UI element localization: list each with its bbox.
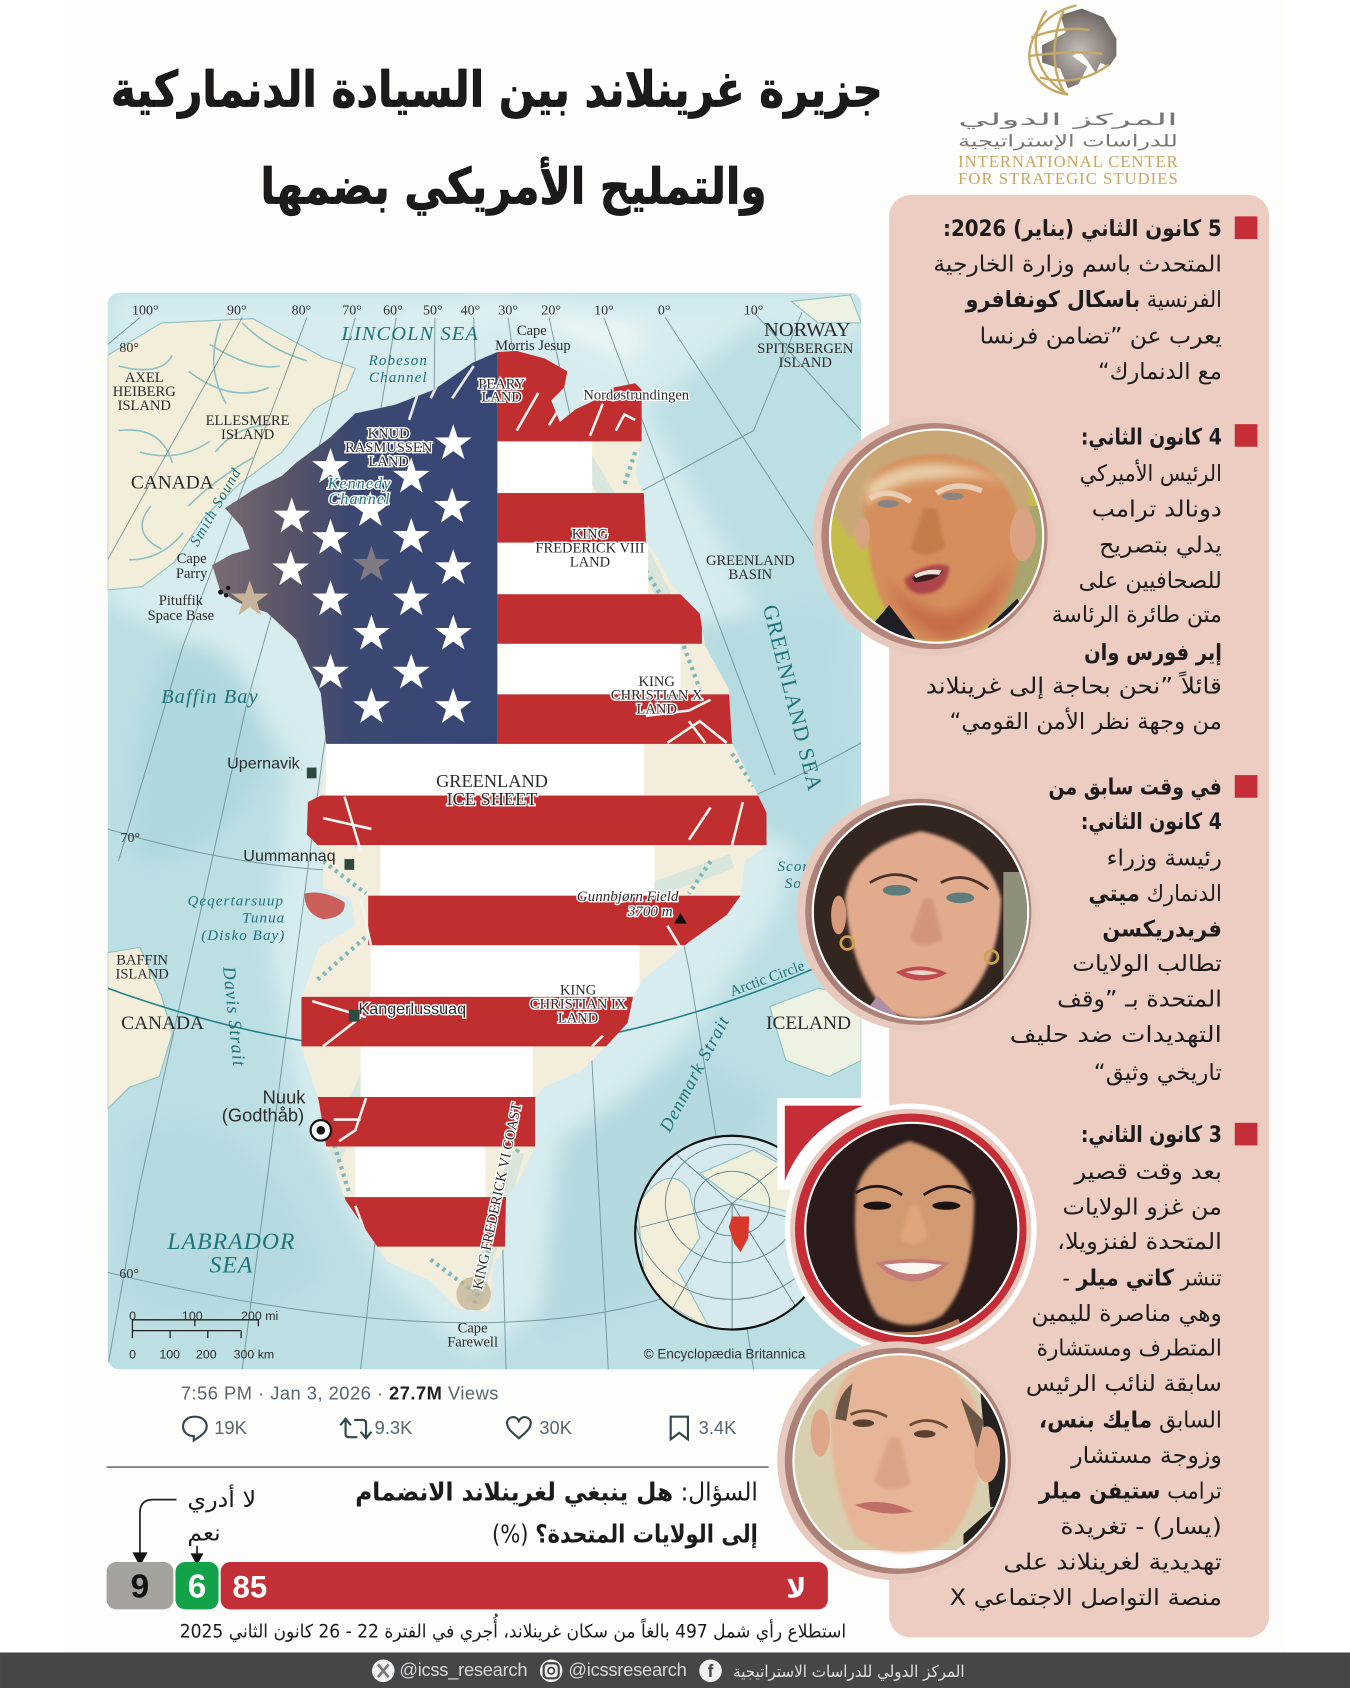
- map labels: Uummannaq: [243, 847, 336, 865]
- map labels: 100°: [132, 303, 159, 318]
- poll bar: 9: [131, 1569, 149, 1606]
- scale bar: 300 km: [234, 1348, 274, 1362]
- logo: International Center for Strategic Studies: المركز الدولي: [958, 110, 1178, 130]
- icon: comment: [183, 1417, 207, 1440]
- scale bar: 100: [182, 1309, 203, 1323]
- map labels: PEARY: [478, 377, 526, 393]
- logo: International Center for Strategic Studies: للدراسات الإستراتيجية: [958, 131, 1178, 151]
- entry: 3 January, Katie Miller: وهي مناصرة لليمين: [1031, 1301, 1222, 1327]
- poll labels and arrows: نعم: [187, 1521, 221, 1547]
- flag red stripes: [296, 344, 775, 1247]
- tweet metadata: 19K: [214, 1417, 247, 1438]
- entry: 5 January: 5 كانون الثاني (يناير) 2026:: [943, 216, 1222, 242]
- map labels: CHRISTIAN X: [611, 688, 703, 704]
- map labels: KING FREDERICK VI COAST: [470, 1101, 525, 1291]
- map labels: KING: [572, 526, 609, 542]
- map labels: 20°: [541, 303, 561, 318]
- entry: 4 January, Trump: يدلي بتصريح: [1099, 532, 1222, 558]
- entry: earlier on 4 January, Frederiksen: فريدريكسن: [1102, 917, 1222, 943]
- map labels: 10°: [594, 303, 614, 318]
- map labels: ISLAND: [221, 427, 274, 443]
- map labels: 80°: [292, 303, 311, 318]
- map of Greenland with US flag overlay: [108, 293, 861, 1369]
- poll bar: [107, 1562, 828, 1609]
- map labels: [113, 303, 854, 1362]
- footer bar: المركز الدولي للدراسات الاستراتيجية: [733, 1662, 965, 1682]
- pale water patches: [108, 293, 861, 1356]
- portrait: Stephen Miller: [777, 1341, 1016, 1580]
- stars: [231, 424, 472, 723]
- entry: earlier on 4 January, Frederiksen: في وقت سابق من: [1049, 774, 1222, 800]
- entry: 4 January, Trump: متن طائرة الرئاسة: [1052, 602, 1222, 628]
- map labels: HEIBERG: [113, 384, 176, 400]
- portrait: Donald Trump: [813, 417, 1052, 656]
- poll bar: لا: [786, 1574, 806, 1605]
- entry: 3 January, Katie Miller: وزوجة مستشار: [1070, 1443, 1222, 1469]
- fjords: [312, 390, 743, 1249]
- poll question: إلى الولايات المتحدة؟ (%): [492, 1520, 758, 1550]
- map labels: ELLESMERE: [206, 413, 290, 429]
- entry: 4 January, Trump: دونالد ترامب: [1092, 497, 1222, 523]
- title: والتمليح الأمريكي بضمها: [261, 155, 767, 216]
- poll question: [355, 1478, 758, 1550]
- entry: 4 January, Trump: الرئيس الأميركي: [1080, 459, 1222, 487]
- entry: 3 January, Katie Miller: منصة التواصل الاجتماعي X: [950, 1585, 1222, 1611]
- entry: 5 January: مع الدنمارك“: [1098, 359, 1222, 385]
- map labels: RASMUSSEN: [345, 440, 433, 456]
- map labels: SPITSBERGEN: [757, 341, 854, 357]
- map labels: Parry: [176, 566, 208, 582]
- tweet metadata: 9.3K: [375, 1417, 412, 1438]
- map labels: Gunnbjørn Field: [577, 889, 679, 905]
- tweet metadata: [181, 1382, 736, 1440]
- white backing and red corner: [777, 1098, 889, 1190]
- map labels: LAND: [570, 554, 610, 570]
- map labels: KING: [560, 983, 597, 999]
- poll bar: 85: [233, 1570, 267, 1605]
- entry: 3 January, Katie Miller: المتطرف ومستشارة: [1037, 1335, 1222, 1361]
- map labels: Kangerlussuaq: [358, 1000, 466, 1018]
- poll source note: استطلاع رأي شمل 497 بالغاً من سكان غرينلاند، أُجري في الفترة 22 - 26 كانون الثاني 2025: [180, 1613, 846, 1642]
- flag canton: [205, 344, 497, 744]
- scale bar: [130, 1311, 278, 1358]
- scale bar: 100: [159, 1348, 180, 1362]
- entry: earlier on 4 January, Frederiksen: المتحدة بـ ”وقف: [1057, 987, 1222, 1013]
- entry: 3 January, Katie Miller: [950, 1122, 1222, 1611]
- map labels: CHRISTIAN IX: [530, 997, 627, 1013]
- tweet metadata: 7:56 PM · Jan 3, 2026 · 27.7M Views: [181, 1382, 498, 1403]
- map labels: BAFFIN: [116, 953, 168, 969]
- map labels: Qeqertarsuup: [187, 893, 284, 909]
- map labels: Nuuk: [263, 1086, 306, 1107]
- icon: X: [372, 1659, 395, 1682]
- map labels: LAND: [368, 454, 409, 470]
- map labels: FREDERICK VIII: [535, 540, 645, 556]
- map labels: Nordøstrundingen: [583, 387, 690, 403]
- icon: heart: [507, 1417, 531, 1438]
- map labels: LAND: [637, 702, 677, 718]
- poll labels and arrows: لا أدري: [187, 1484, 256, 1513]
- graticule: [108, 312, 861, 1369]
- entry: 4 January, Trump: [926, 425, 1222, 735]
- map labels: KNUD: [368, 426, 410, 442]
- title: [111, 61, 883, 216]
- map labels: LAND: [482, 390, 522, 406]
- entry: 5 January: يعرب عن ”تضامن فرنسا: [980, 323, 1222, 349]
- map labels: Cape: [517, 323, 547, 339]
- map labels: GREENLAND SEA: [758, 602, 827, 794]
- map labels: 60°: [383, 303, 403, 318]
- entry: earlier on 4 January, Frederiksen: 4 كانون الثاني:: [1081, 809, 1222, 835]
- map labels: Scor: [777, 859, 809, 875]
- scale bar: 200 mi: [241, 1309, 278, 1323]
- entry: 4 January, Trump: للصحافيين على: [1079, 568, 1222, 594]
- map labels: 70°: [342, 303, 362, 318]
- portrait: Mette Frederiksen: [797, 792, 1036, 1031]
- entry: 4 January, Trump: قائلاً ”نحن بحاجة إلى غرينلاند: [926, 671, 1222, 699]
- map labels: Baffin Bay: [161, 686, 259, 708]
- map labels: LABRADOR: [166, 1229, 296, 1255]
- map labels: Robeson: [368, 353, 428, 369]
- inset globe: [634, 1134, 805, 1331]
- map labels: SEA: [209, 1252, 253, 1278]
- map labels: 30°: [498, 303, 518, 318]
- map labels: Kennedy: [327, 476, 392, 493]
- entry: earlier on 4 January, Frederiksen: [1010, 774, 1222, 1086]
- bullet: [1235, 216, 1257, 239]
- map labels: 3700 m: [627, 904, 673, 920]
- map labels: 80°: [119, 341, 139, 356]
- map labels: GREENLAND: [706, 553, 795, 569]
- poll labels and arrows: [132, 1484, 256, 1566]
- map labels: 90°: [227, 303, 247, 318]
- map labels: LINCOLN SEA: [341, 323, 479, 345]
- Canadian arctic land: [108, 319, 355, 590]
- logo: International Center for Strategic Studies: [958, 5, 1179, 188]
- map labels: 10°: [744, 303, 763, 318]
- map labels: 60°: [119, 1267, 139, 1282]
- poll question: السؤال: هل ينبغي لغرينلاند الانضمام: [355, 1478, 758, 1508]
- map labels: Space Base: [148, 608, 214, 624]
- scale bar: 0: [129, 1348, 136, 1362]
- entry: 3 January, Katie Miller: ترامب ستيفن ميلر: [1038, 1479, 1222, 1505]
- entry: 3 January, Katie Miller: سابقة لنائب الرئيس: [1026, 1371, 1222, 1397]
- entry: earlier on 4 January, Frederiksen: رئيسة وزراء: [1107, 846, 1222, 872]
- map labels: 0°: [658, 303, 671, 318]
- tweet metadata: 3.4K: [699, 1417, 736, 1438]
- map labels: ISLAND: [118, 398, 171, 414]
- arctic circle: [108, 968, 812, 1042]
- entry: 4 January, Trump: إير فورس وان: [1084, 640, 1222, 666]
- map labels: NORWAY: [764, 319, 851, 341]
- map labels: AXEL: [125, 370, 164, 386]
- entry: 3 January, Katie Miller: بعد وقت قصير: [1073, 1159, 1222, 1185]
- map labels: 70°: [120, 831, 140, 846]
- entry: 3 January, Katie Miller: تهديدية لغرينلاند على: [1003, 1550, 1222, 1576]
- map labels: ISLAND: [116, 967, 169, 983]
- map labels: ICELAND: [766, 1013, 851, 1034]
- Greenland land: [205, 344, 775, 1324]
- bullet: [1235, 775, 1257, 798]
- map labels: Morris Jesup: [495, 338, 571, 354]
- map labels: Cape: [177, 551, 207, 567]
- map labels: GREENLAND: [436, 771, 548, 791]
- footer bar: @icssresearch: [568, 1659, 687, 1680]
- map labels: Davis Strait: [219, 965, 249, 1068]
- faint canton patches: [408, 365, 475, 420]
- tweet metadata: 30K: [539, 1417, 572, 1438]
- icon: bookmark: [671, 1417, 688, 1439]
- map labels: Upernavik: [227, 755, 301, 773]
- poll bar: 6: [188, 1569, 206, 1606]
- bullet: [1235, 424, 1257, 447]
- map labels: 50°: [423, 303, 443, 318]
- map labels: Pituffik: [159, 593, 204, 609]
- entry: 3 January, Katie Miller: المتحدة لفنزويلا،: [1057, 1229, 1222, 1255]
- entry: earlier on 4 January, Frederiksen: تطالب الولايات: [1072, 951, 1222, 977]
- entry: 3 January, Katie Miller: السابق مايك بنس،: [1039, 1407, 1222, 1433]
- footer bar: @icss_research: [399, 1659, 528, 1681]
- map labels: Channel: [369, 370, 428, 386]
- flag white stripes: [497, 441, 592, 493]
- entry: earlier on 4 January, Frederiksen: التهديدات ضد حليف: [1010, 1022, 1222, 1048]
- icon: instagram: [540, 1659, 563, 1682]
- entry: 4 January, Trump: 4 كانون الثاني:: [1081, 425, 1222, 451]
- map labels: So: [785, 876, 802, 892]
- map labels: Denmark Strait: [655, 1012, 733, 1136]
- entry: 3 January, Katie Miller: تنشر كاتي ميلر -: [1063, 1265, 1222, 1291]
- entry: earlier on 4 January, Frederiksen: تاريخي وثيق“: [1094, 1060, 1222, 1086]
- title: جزيرة غرينلاند بين السيادة الدنماركية: [111, 61, 883, 120]
- Disko island: [305, 892, 345, 919]
- map labels: (Disko Bay): [201, 928, 285, 944]
- entry: 5 January: [933, 216, 1222, 385]
- map labels: BASIN: [729, 567, 773, 583]
- map labels: ICE SHEET: [447, 789, 537, 809]
- entry: 4 January, Trump: من وجهة نظر الأمن القومي“: [950, 707, 1222, 735]
- map labels: Farewell: [447, 1335, 498, 1351]
- map labels: 40°: [461, 303, 480, 318]
- map labels: KING: [639, 674, 675, 690]
- map labels: Channel: [328, 491, 391, 508]
- scale bar: 0: [129, 1309, 136, 1323]
- map labels: LAND: [558, 1011, 598, 1027]
- entry: 5 January: الفرنسية باسكال كونفافرو: [965, 287, 1222, 313]
- panel: timeline: [889, 195, 1269, 1637]
- entry: 3 January, Katie Miller: من غزو الولايات: [1063, 1194, 1222, 1220]
- entry: 3 January, Katie Miller: (يسار) - تغريدة: [1060, 1514, 1222, 1540]
- portrait: Katie Miller: [785, 1103, 1037, 1355]
- bullet: [1235, 1123, 1257, 1145]
- map labels: CANADA: [121, 1013, 204, 1034]
- icon: facebook: [699, 1659, 722, 1682]
- footer bar: [0, 1652, 1350, 1688]
- scale bar: 200: [196, 1348, 217, 1362]
- map labels: CANADA: [131, 473, 214, 494]
- map labels: Tunua: [242, 911, 285, 927]
- icon: retweet: [340, 1419, 371, 1438]
- icon: facebook: f: [708, 1661, 714, 1681]
- map labels: Arctic Circle: [728, 958, 807, 1000]
- logo: International Center for Strategic Studies: INTERNATIONAL CENTER: [958, 152, 1179, 171]
- map labels: (Godthåb): [222, 1105, 304, 1126]
- map labels: ISLAND: [779, 355, 832, 371]
- map labels: © Encyclopædia Britannica: [644, 1347, 806, 1362]
- logo: International Center for Strategic Studies: FOR STRATEGIC STUDIES: [958, 169, 1178, 188]
- map labels: Smith Sound: [187, 465, 245, 549]
- map labels: Cape: [458, 1321, 488, 1337]
- entry: 5 January: المتحدث باسم وزارة الخارجية: [933, 251, 1222, 277]
- entry: earlier on 4 January, Frederiksen: الدنمارك ميتي: [1088, 881, 1222, 907]
- entry: 3 January, Katie Miller: 3 كانون الثاني:: [1081, 1122, 1222, 1148]
